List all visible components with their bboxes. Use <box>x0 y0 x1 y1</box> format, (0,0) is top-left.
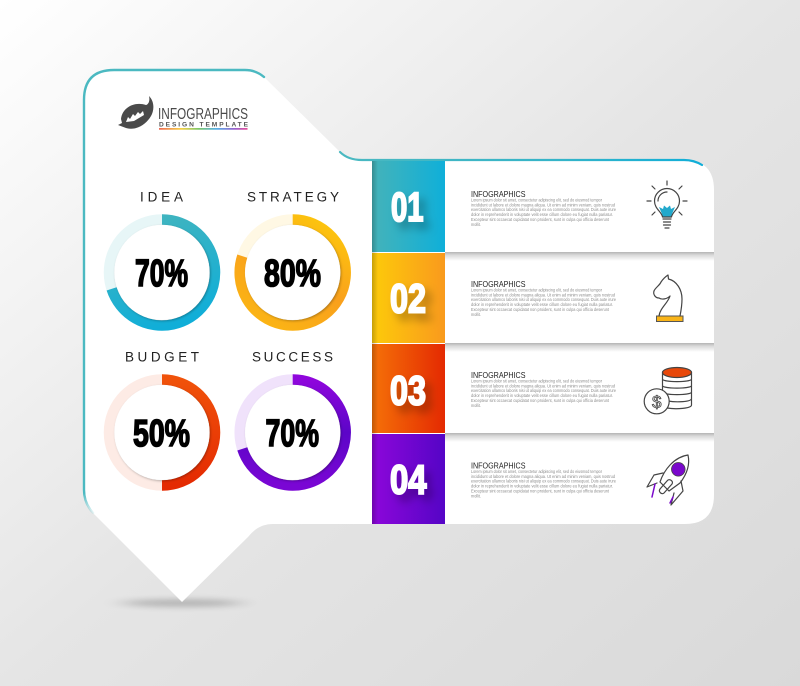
text block 03: incididunt ut labore et dolore magna aliqua. Ut enim ad minim veniam, quis nostrud <box>471 383 616 388</box>
text block 04: incididunt ut labore et dolore magna aliqua. Ut enim ad minim veniam, quis nostrud <box>471 474 616 479</box>
ring: success 70%: 70% <box>266 413 319 455</box>
number tab 04: 04 <box>390 456 427 502</box>
number tab 03: 03 <box>390 368 426 414</box>
icon: coins <box>644 368 692 414</box>
number tab 03 <box>372 344 445 433</box>
ring: idea 70% <box>109 190 215 326</box>
icon: rocket <box>647 455 689 505</box>
panel: white pin-shaped card <box>83 69 714 602</box>
ring: success 70%: SUCCESS <box>252 350 333 364</box>
text block 04: Excepteur sint occaecat cupidatat non proident, sunt in culpa qui officia deserunt <box>471 488 610 493</box>
text block 03 <box>471 370 617 408</box>
ring: strategy 80%: STRATEGY <box>247 190 339 204</box>
text block 01: incididunt ut labore et dolore magna aliqua. Ut enim ad minim veniam, quis nostrud <box>471 202 616 207</box>
text block 04: INFOGRAPHICS <box>471 460 526 470</box>
text block 02: Excepteur sint occaecat cupidatat non proident, sunt in culpa qui officia deserunt <box>471 307 610 312</box>
row 03 <box>372 344 692 433</box>
logo mark <box>118 96 153 129</box>
text block 03: exercitation ullamco laboris nisi ut aliquip ex ea commodo consequat. Duis aute irure <box>471 388 617 393</box>
logo <box>118 96 249 130</box>
text block 02: exercitation ullamco laboris nisi ut aliquip ex ea commodo consequat. Duis aute irure <box>471 297 617 302</box>
text block 04: dolor in reprehenderit in voluptate velit esse cillum dolore eu fugiat nulla pariatur. <box>471 484 613 488</box>
text block 04: Lorem ipsum dolor sit amet, consectetur adipiscing elit, sed do eiusmod tempor <box>471 469 603 474</box>
ring: success 70% <box>240 350 346 486</box>
text block 02: dolor in reprehenderit in voluptate velit esse cillum dolore eu fugiat nulla pariatur. <box>471 302 613 307</box>
text block 02 <box>471 279 617 317</box>
ring: strategy 80% <box>240 190 346 326</box>
text block 02: incididunt ut labore et dolore magna aliqua. Ut enim ad minim veniam, quis nostrud <box>471 292 616 297</box>
text block 03: Lorem ipsum dolor sit amet, consectetur adipiscing elit, sed do eiusmod tempor <box>471 378 603 384</box>
ring: idea 70%: IDEA <box>140 190 183 204</box>
number tab 01 <box>372 161 445 252</box>
row 01 <box>372 161 687 252</box>
icon: light bulb <box>647 181 687 228</box>
text block 04 <box>471 460 617 498</box>
pin ground shadow <box>122 599 242 607</box>
text block 01: Lorem ipsum dolor sit amet, consectetur adipiscing elit, sed do eiusmod tempor <box>471 198 603 202</box>
row 02 <box>372 253 683 343</box>
panel edge: teal top-left outline <box>84 70 264 513</box>
text block 03: INFOGRAPHICS <box>471 370 526 380</box>
text block 01: Excepteur sint occaecat cupidatat non proident, sunt in culpa qui officia deserunt <box>471 217 610 222</box>
text block 04: mollit. <box>471 493 481 498</box>
panel edge: teal top-right outline <box>340 152 702 165</box>
text block 04: exercitation ullamco laboris nisi ut aliquip ex ea commodo consequat. Duis aute irure <box>471 479 617 484</box>
text block 02: mollit. <box>471 312 481 317</box>
panel: progress rings <box>109 190 346 486</box>
text block 01: dolor in reprehenderit in voluptate velit esse cillum dolore eu fugiat nulla pariatur. <box>471 212 613 217</box>
logo title: INFOGRAPHICS <box>158 106 248 123</box>
text block 03: dolor in reprehenderit in voluptate velit esse cillum dolore eu fugiat nulla pariatur. <box>471 393 613 398</box>
text block 02: INFOGRAPHICS <box>471 279 526 289</box>
ring: budget 50% <box>109 350 215 486</box>
tab left-edge shade <box>372 161 378 524</box>
number tab 04 <box>372 434 445 524</box>
number tab 02 <box>372 253 445 343</box>
text block 01 <box>471 189 617 227</box>
icon: chess knight <box>654 275 683 322</box>
text block 01: exercitation ullamco laboris nisi ut aliquip ex ea commodo consequat. Duis aute irure <box>471 207 617 212</box>
text block 03: Excepteur sint occaecat cupidatat non proident, sunt in culpa qui officia deserunt <box>471 398 610 403</box>
row separators <box>445 252 714 261</box>
number tab 01: 01 <box>391 184 424 230</box>
ring: budget 50%: BUDGET <box>125 350 199 364</box>
number tab 02: 02 <box>390 276 426 322</box>
ring: idea 70%: 70% <box>135 253 188 295</box>
logo subtitle: DESIGN TEMPLATE <box>159 122 249 128</box>
icon: coins: $ <box>652 392 662 412</box>
text block 03: mollit. <box>471 403 481 408</box>
ring: budget 50%: 50% <box>133 413 190 455</box>
text block 01: mollit. <box>471 222 481 227</box>
ring: strategy 80%: 80% <box>264 253 321 295</box>
row 04 <box>372 434 689 524</box>
logo rainbow rule <box>159 128 248 130</box>
text block 02: Lorem ipsum dolor sit amet, consectetur adipiscing elit, sed do eiusmod tempor <box>471 288 603 292</box>
text block 01: INFOGRAPHICS <box>471 189 526 199</box>
